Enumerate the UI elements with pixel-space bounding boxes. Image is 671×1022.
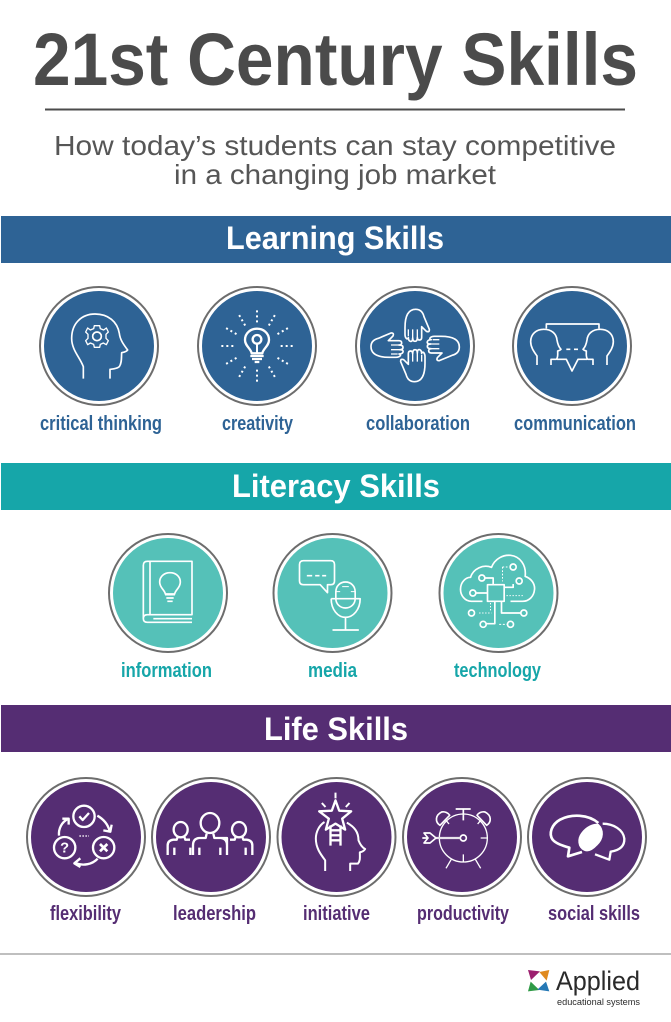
icon: productivity alarm clock with arrow [403,778,521,896]
subtitle: in a changing job market [174,159,496,190]
subtitle [54,130,616,190]
label: flexibility: flexibility [50,903,122,925]
icon: media speech bubble and microphone [274,534,392,652]
label: social skills: social skills [548,903,640,925]
heading band: learning skills [1,216,671,263]
heading band: life skills [1,705,671,752]
subtitle: How today’s students can stay competitive [54,130,616,161]
icon: collaboration four hands [356,287,474,405]
label: media: media [308,660,358,682]
label: technology: technology [454,660,542,682]
label: creativity: creativity [222,413,294,435]
icon: leadership three people [152,778,270,896]
label: information: information [121,660,212,682]
heading band: literacy skills [1,463,671,510]
heading band: literacy skills: Literacy Skills [232,468,440,504]
label: critical thinking: critical thinking [40,413,162,435]
icon: communication two heads [513,287,631,405]
label: leadership: leadership [173,903,256,925]
label: productivity: productivity [417,903,510,925]
logo: Applied educational systems: Applied [556,966,640,996]
label: initiative: initiative [303,903,370,925]
panel: life skills [1,705,671,925]
heading band: learning skills: Learning Skills [226,220,444,256]
panel: literacy skills [1,463,671,682]
icon: flexibility decision cycle [27,778,145,896]
logo: Applied educational systems: educational systems [557,997,640,1008]
label: communication: communication [514,413,636,435]
icon: initiative head with ladder and star [278,778,396,896]
icon: technology cloud circuit [440,534,558,652]
label: collaboration: collaboration [366,413,470,435]
icon: creativity light bulb [198,287,316,405]
icon: critical thinking head with gear [40,287,158,405]
heading band: life skills: Life Skills [264,711,408,747]
icon: flexibility decision cycle: ? [60,841,69,857]
icon: social skills overlapping speech bubbles [528,778,646,896]
panel: learning skills [1,216,671,435]
logo: Applied educational systems [528,966,640,1008]
icon: information book with bulb [109,534,227,652]
